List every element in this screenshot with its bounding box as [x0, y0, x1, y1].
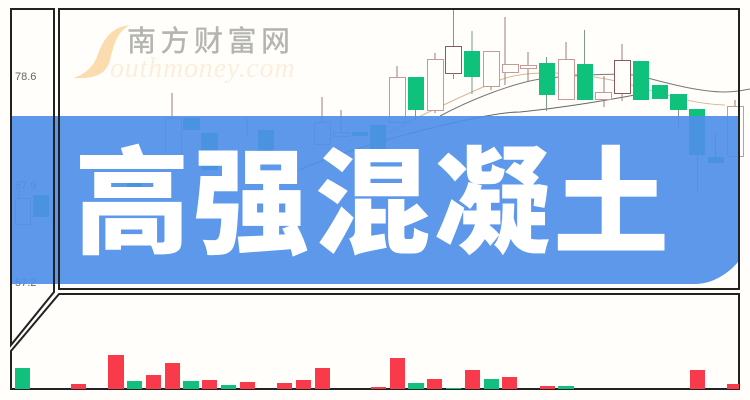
candlestick chart — [16, 9, 750, 224]
title: 混 — [314, 110, 430, 278]
blue title band — [11, 116, 738, 284]
green volume bars — [15, 368, 574, 389]
frame: left axis box — [11, 9, 54, 345]
watermark: southmoney logo — [73, 25, 295, 84]
frame: main chart box — [59, 9, 739, 289]
title: 强 — [193, 110, 309, 278]
hollow red candles — [16, 17, 744, 224]
watermark: southmoney logo: 南方财富网 — [127, 25, 295, 58]
volume bars — [15, 355, 739, 389]
red volume bars — [71, 355, 739, 389]
green candles — [33, 9, 724, 217]
price axis labels: 78.6 — [15, 71, 36, 83]
price axis labels: 67.9 — [15, 180, 36, 192]
title — [74, 110, 669, 278]
price axis labels: 57.2 — [15, 277, 36, 289]
watermark: southmoney logo: outhmoney.com — [110, 53, 295, 84]
title: 高 — [74, 110, 190, 278]
price axis labels — [15, 71, 36, 289]
moving average lines — [300, 73, 750, 170]
title: 土 — [553, 110, 669, 278]
frame: volume box — [11, 294, 739, 389]
title: 凝 — [434, 110, 550, 278]
